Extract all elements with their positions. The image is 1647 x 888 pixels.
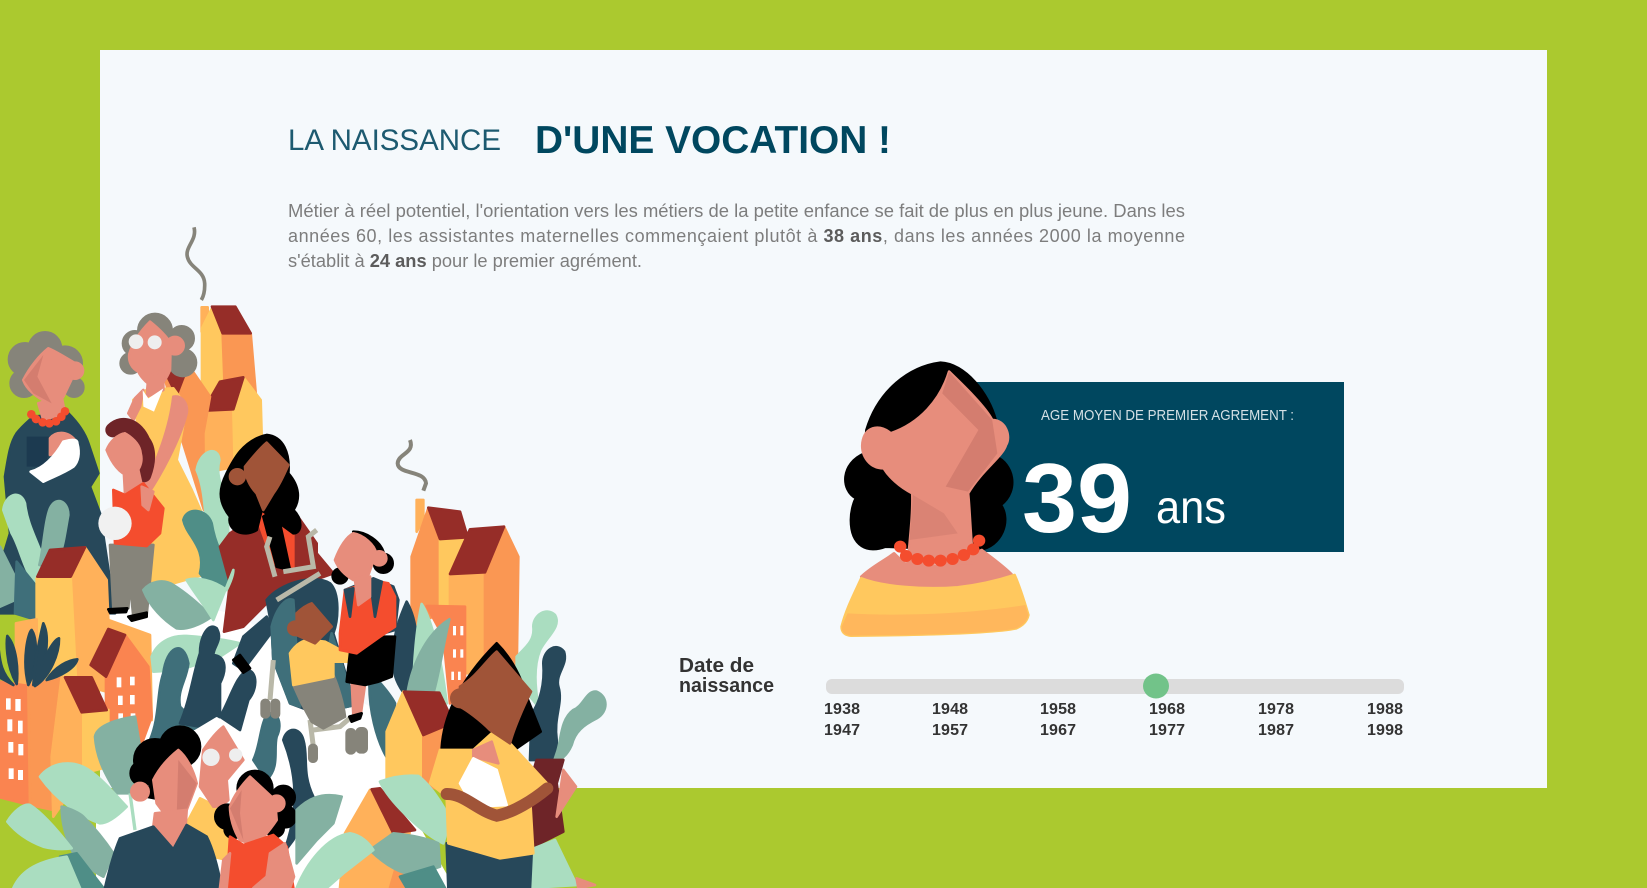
stat box: average age [970,382,1344,552]
mother holding baby [430,643,595,888]
foreground left leaves [7,570,313,888]
mother with long black hair [183,435,333,632]
intro text: Métier à réel potentiel, l'orientation vers les métiers de la petite enfance se fait de plus en plus jeune. Dans les [288,201,1185,221]
slider year labels: 1987 [1258,722,1294,739]
slider year labels: 1988 [1367,701,1403,718]
illustration: families and houses [0,227,605,888]
slider year labels: 1978 [1258,701,1294,718]
slider year labels: 1958 [1040,701,1076,718]
portrait of woman [842,363,1028,636]
houses centre with smoke [398,440,518,703]
man, girl and woman with glasses in the foreground [105,718,296,888]
birth date slider [826,674,1404,698]
boy with ball [98,425,163,621]
front houses and leaves [297,692,450,888]
slider knob [1143,674,1169,698]
old woman with glasses [121,314,210,590]
slider year labels: 1968 [1149,701,1185,718]
houses top left with smoke [187,227,262,477]
stat value [1022,443,1226,553]
slider year labels: 1947 [824,722,860,739]
grandmother with baby [0,332,115,613]
slider label [679,655,774,697]
slider year labels: 1977 [1149,722,1185,739]
stat value: 39 [1022,443,1132,553]
content panel [100,50,1547,788]
left central buildings [0,547,152,817]
stat unit: ans [1156,481,1226,533]
slider year labels: 1948 [932,701,968,718]
title [288,119,891,162]
intro text [288,201,1185,271]
plants right side [369,602,605,763]
stroller with child [233,530,367,762]
title: LA NAISSANCE [288,124,501,157]
slider year labels: 1967 [1040,722,1076,739]
slider year labels: 1938 [824,701,860,718]
intro text: s'établit à 24 ans pour le premier agrément. [288,251,642,271]
slider label: Date de [679,655,754,677]
slider year labels: 1998 [1367,722,1403,739]
slider year labels [824,701,1403,739]
intro text: années 60, les assistantes maternelles commençaient plutôt à 38 ans, dans les années 2000 la moyenne [288,226,1185,246]
title: D'UNE VOCATION ! [535,119,891,162]
white ground path [100,610,450,888]
girl with backpack [333,532,398,722]
stat label: AGE MOYEN DE PREMIER AGREMENT : [1041,408,1294,424]
slider label: naissance [679,675,774,697]
slider year labels: 1957 [932,722,968,739]
left plants [0,495,68,620]
